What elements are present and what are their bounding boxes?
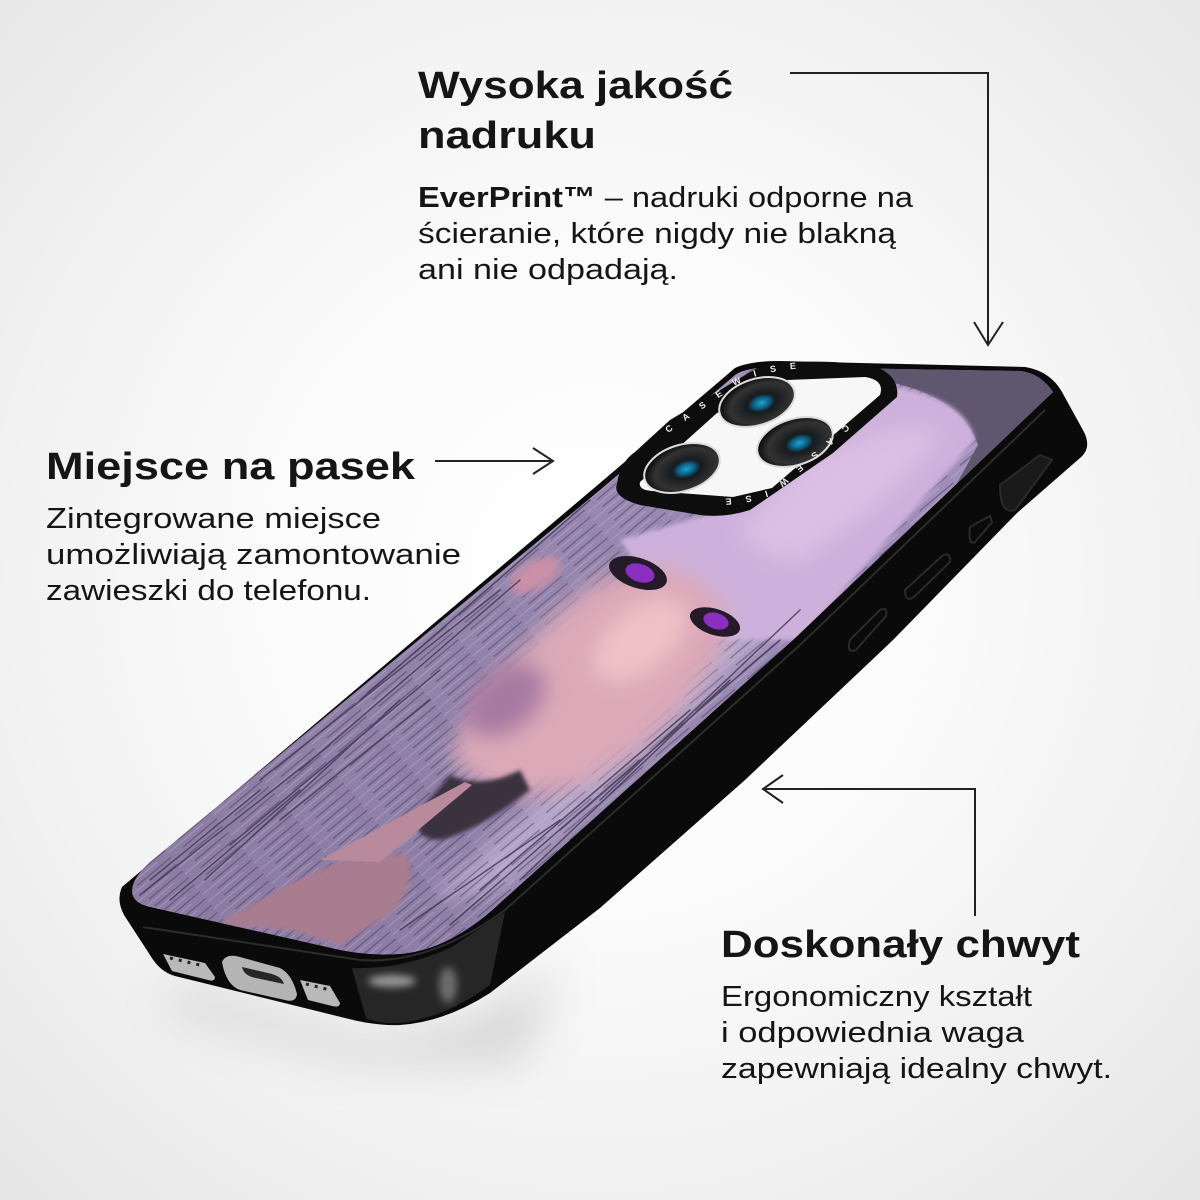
- lens left: [638, 434, 726, 502]
- raised hand, abstract: [218, 853, 410, 945]
- case artwork: [132, 368, 1053, 954]
- right eye: [690, 607, 740, 637]
- arrow: strap slot to case: [435, 448, 553, 474]
- text block: grip: [721, 981, 1112, 1085]
- camera ring: [616, 362, 897, 516]
- case body: [119, 361, 1087, 1025]
- speaker grille left: [163, 954, 215, 981]
- light hair band: [620, 385, 975, 640]
- dark corner: [881, 368, 1053, 484]
- camera ring lettering: CASEWISE: [666, 362, 796, 432]
- phone case: [119, 361, 1088, 1026]
- text block: strap slot: Zintegrowane miejsce: [46, 503, 381, 535]
- glossy corner: [352, 912, 505, 1023]
- lens right: [751, 408, 839, 476]
- hair strands: [140, 500, 800, 930]
- text block: print quality: [418, 182, 914, 286]
- callout: print quality: [418, 65, 914, 286]
- left eye: [609, 556, 667, 590]
- ear-toned accent: [506, 553, 564, 598]
- hair streak texture: [132, 368, 1053, 954]
- side buttons: [849, 455, 1052, 651]
- text block: strap slot: [46, 503, 461, 607]
- camera island: [616, 362, 898, 516]
- heading: print quality: nadruku: [418, 115, 596, 157]
- text block: grip: zapewniają idealny chwyt.: [721, 1053, 1112, 1085]
- camera inner plate: [640, 377, 881, 497]
- lighter hair along edge: [436, 639, 772, 904]
- heading: grip: Doskonały chwyt: [721, 924, 1080, 966]
- text block: print quality: EverPrint™ – nadruki odporne na: [418, 182, 914, 214]
- heading: print quality: [418, 65, 733, 157]
- text block: print quality: ani nie odpadają.: [418, 254, 678, 286]
- text block: strap slot: zawieszki do telefonu.: [46, 575, 371, 607]
- heading: strap slot: Miejsce na pasek: [46, 446, 416, 488]
- hair highlight: [749, 431, 929, 556]
- soft shaded lower area: [458, 658, 553, 745]
- camera ring lettering: [666, 362, 849, 505]
- pink strand: [320, 782, 472, 862]
- camera ring lettering: CASEWISE: [726, 425, 849, 505]
- callout: grip: [721, 924, 1112, 1085]
- text block: grip: Ergonomiczny kształt: [721, 981, 1032, 1013]
- arrow: grip to case: [763, 775, 975, 916]
- text block: print quality: ścieranie, które nigdy nie blakną: [418, 218, 897, 250]
- artwork base: [132, 368, 1053, 954]
- arrow: print quality to case: [790, 73, 1003, 345]
- speaker grille right: [300, 980, 340, 1007]
- lighter skin highlight: [591, 594, 689, 686]
- charging port: [222, 956, 297, 1001]
- text block: grip: i odpowiednia waga: [721, 1017, 1025, 1049]
- callout: strap slot: [46, 446, 461, 607]
- shadowed collar area: [418, 770, 530, 840]
- phone shadow: [170, 960, 560, 1060]
- lens top: [713, 368, 801, 436]
- heading: print quality: Wysoka jakość: [418, 65, 733, 107]
- case rim line: [143, 410, 1045, 960]
- text block: strap slot: umożliwiają zamontowanie: [46, 539, 461, 571]
- soft skin-toned area: [450, 567, 727, 795]
